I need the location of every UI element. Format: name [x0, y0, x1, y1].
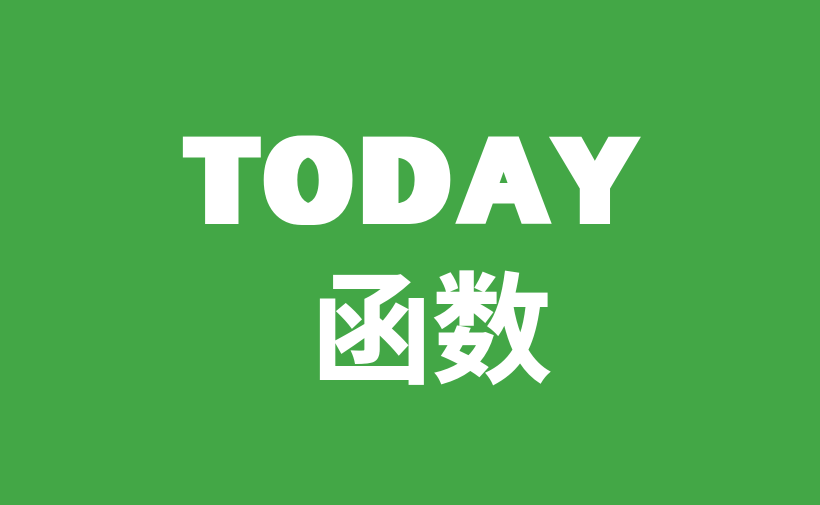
subtitle: 函数: 函数 [312, 265, 552, 399]
title: TODAY: D [365, 116, 445, 244]
title: TODAY: Y [557, 117, 633, 245]
title: TODAY: A [460, 116, 547, 244]
title: TODAY [191, 115, 633, 245]
title: TODAY: O [269, 116, 347, 245]
title: TODAY: T [191, 115, 252, 245]
